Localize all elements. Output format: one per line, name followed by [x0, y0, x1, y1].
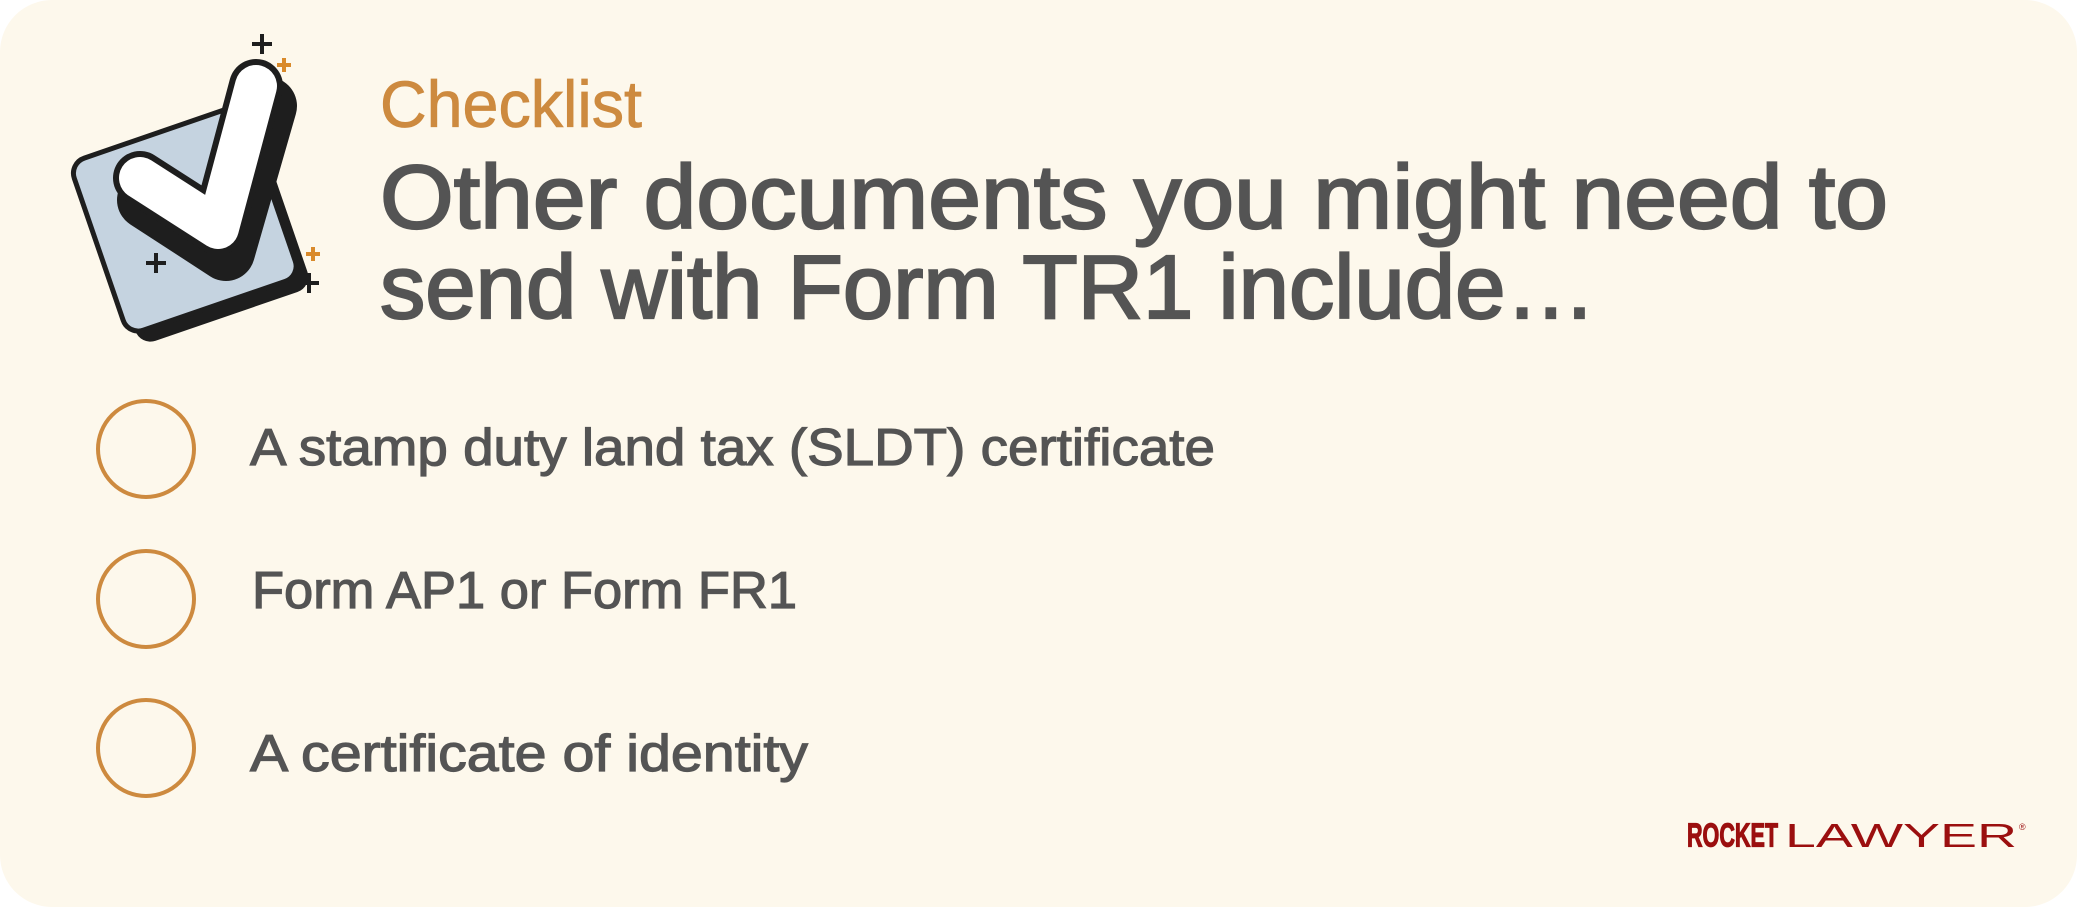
logo: Rocket Lawyer: ®: [2019, 822, 2026, 832]
subtitle: Checklist: Checklist: [380, 67, 642, 141]
logo: Rocket Lawyer: ROCKET: [1687, 817, 1778, 854]
title: send with Form TR1 include…: [380, 238, 1596, 338]
item 3: A certificate of identity: [250, 725, 808, 783]
item 1: [98, 401, 1215, 497]
item 2: [98, 551, 797, 647]
title: [380, 148, 1888, 338]
item 3: [98, 700, 808, 796]
title: Other documents you might need to: [380, 148, 1888, 248]
logo: Rocket Lawyer: LAWYER: [1785, 817, 2017, 854]
logo: Rocket Lawyer: [1687, 817, 2026, 854]
icon: checkbox with checkmark: [69, 34, 320, 349]
item 1: A stamp duty land tax (SLDT) certificate: [250, 419, 1215, 477]
item 2: Form AP1 or Form FR1: [252, 562, 797, 620]
